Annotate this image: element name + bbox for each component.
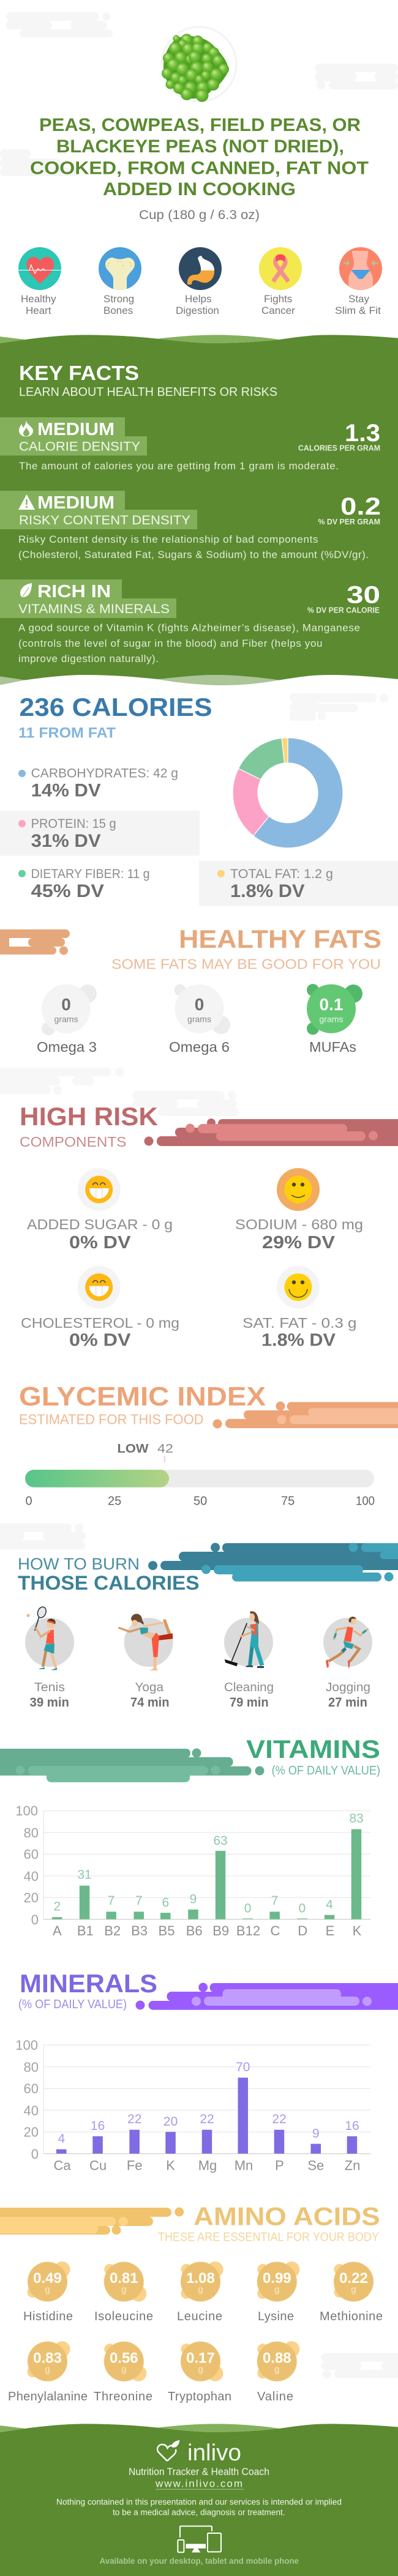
amino: threonine: Threonine xyxy=(94,2390,152,2403)
label: healthy heart: Healthy xyxy=(21,293,56,305)
icon: devices xyxy=(178,2526,221,2553)
fact: rich in vitamins and minerals: % DV PER CALORIE xyxy=(307,606,380,614)
glycemic scale bar: 75 xyxy=(281,1495,295,1508)
fact: risky content density: MEDIUM xyxy=(37,493,115,513)
macro: total fat: 1.8% DV xyxy=(230,881,305,901)
icon: fights cancer ribbon xyxy=(259,247,302,290)
amino: leucine: g xyxy=(198,2285,203,2295)
bar chart: vitamins: 2 xyxy=(53,1899,61,1913)
fat: omega 6: 0 xyxy=(195,995,204,1014)
activity label: tennis: 39 min xyxy=(29,1696,69,1710)
bar chart: vitamins: A xyxy=(53,1923,62,1938)
bar chart: vitamins: B3 xyxy=(131,1923,148,1938)
macro: total fat xyxy=(199,861,398,906)
bar chart: vitamins: 0 xyxy=(31,1912,39,1927)
amino: tryptophan: 0.17 xyxy=(186,2350,215,2366)
bar chart: vitamins: 100 xyxy=(15,1803,38,1818)
component: added sugar xyxy=(27,1168,173,1253)
bar chart: minerals: Zn xyxy=(345,2158,360,2173)
amino: methionine xyxy=(320,2261,383,2323)
fact: calorie density: MEDIUM xyxy=(37,420,115,439)
background cloud xyxy=(321,2353,398,2379)
amino: leucine: 1.08 xyxy=(186,2270,215,2287)
bar chart: vitamins: 7 xyxy=(271,1894,278,1908)
amino: isoleucine: 0.81 xyxy=(110,2270,138,2287)
bar chart: vitamins xyxy=(15,1803,370,1938)
macro: protein: PROTEIN: 15 g xyxy=(31,817,116,831)
bar chart: minerals: Mn xyxy=(235,2158,253,2173)
bar chart: minerals: 20 xyxy=(24,2124,39,2140)
amino: histidine: g xyxy=(45,2285,50,2295)
bar chart: vitamins: 63 xyxy=(213,1834,228,1848)
bar chart: vitamins: 83 xyxy=(349,1811,364,1826)
icon: leaf xyxy=(20,583,32,597)
bar chart: vitamins: 0 xyxy=(244,1902,251,1916)
activity label: yoga: 74 min xyxy=(130,1696,169,1710)
icon: healthy heart xyxy=(18,247,61,290)
amino: threonine: g xyxy=(121,2364,126,2375)
bar chart: vitamins: B2 xyxy=(104,1923,121,1938)
heading: HOW TO BURN xyxy=(18,1555,140,1573)
panel: minerals xyxy=(15,1969,398,2173)
amino: phenylalanine: g xyxy=(45,2364,50,2375)
component: added sugar: ADDED SUGAR - 0 g xyxy=(27,1216,173,1232)
bar chart: minerals: 70 xyxy=(236,2060,250,2074)
label: fights cancer: Cancer xyxy=(261,305,295,316)
bar chart: vitamins: 9 xyxy=(190,1892,197,1907)
macro: carbohydrates xyxy=(18,767,178,801)
tagline: Nutrition Tracker & Health Coach xyxy=(129,2466,269,2477)
bar chart: vitamins: 7 xyxy=(135,1894,143,1908)
fat: MUFAs xyxy=(307,984,362,1055)
bar chart: vitamins: K xyxy=(353,1923,362,1938)
bar chart: vitamins: B6 xyxy=(186,1923,203,1938)
availability note: Available on your desktop, tablet and mobile phone xyxy=(99,2556,299,2566)
fat: omega 3 xyxy=(37,985,97,1055)
amino: tryptophan: Tryptophan xyxy=(168,2390,231,2403)
fact: risky content density: % DV PER GRAM xyxy=(318,517,380,526)
label: strong bones: Strong xyxy=(103,293,134,305)
background clouds: header xyxy=(0,12,398,176)
panel: vitamins xyxy=(0,1735,380,1938)
logo: inlivo xyxy=(157,2440,241,2466)
activity label: yoga: Yoga xyxy=(135,1681,164,1694)
amino: phenylalanine: 0.83 xyxy=(33,2350,62,2366)
icon: stay slim and fit xyxy=(339,247,382,291)
amino: leucine: Leucine xyxy=(177,2310,222,2323)
glycemic value marker xyxy=(118,1442,173,1462)
panel: key facts xyxy=(0,335,398,685)
bar chart: minerals: 22 xyxy=(200,2112,214,2126)
bar chart: minerals: Cu xyxy=(89,2158,107,2173)
subheading: (% OF DAILY VALUE) xyxy=(272,1764,380,1778)
macro: protein xyxy=(0,811,200,856)
amino: isoleucine: g xyxy=(121,2285,126,2295)
component: sodium: SODIUM - 680 mg xyxy=(235,1216,363,1232)
fat: omega 3: Omega 3 xyxy=(37,1039,97,1055)
fat: omega 3: grams xyxy=(54,1014,78,1024)
activity label: cleaning: Cleaning xyxy=(224,1681,274,1694)
amino: leucine xyxy=(177,2261,223,2323)
bar chart: vitamins: 7 xyxy=(108,1894,115,1908)
decoration: orange streaks xyxy=(0,929,70,955)
amino: phenylalanine: Phenylalanine xyxy=(8,2390,88,2403)
glycemic value marker: 42 xyxy=(157,1442,173,1456)
serving size: Cup (180 g / 6.3 oz) xyxy=(139,208,260,222)
glycemic scale bar: 0 xyxy=(26,1495,32,1508)
label: healthy heart: Heart xyxy=(26,305,51,316)
bar chart: minerals: 22 xyxy=(127,2112,141,2126)
bar chart: minerals: 22 xyxy=(272,2112,287,2126)
title xyxy=(30,115,369,199)
title: ADDED IN COOKING xyxy=(103,179,296,199)
wave background xyxy=(0,2424,398,2576)
amino: isoleucine: Isoleucine xyxy=(94,2310,153,2323)
bar chart: minerals: 4 xyxy=(58,2132,65,2146)
decoration: red streaks xyxy=(145,1119,398,1146)
bar chart: minerals: Ca xyxy=(53,2158,71,2173)
subheading: COMPONENTS xyxy=(20,1134,127,1150)
bar chart: vitamins: E xyxy=(326,1923,334,1938)
macro: protein: 31% DV xyxy=(31,831,101,851)
label: stay slim and fit: Stay xyxy=(348,293,370,305)
health benefits row xyxy=(18,247,382,316)
amino: methionine: Methionine xyxy=(320,2310,383,2323)
amino: phenylalanine xyxy=(8,2341,88,2403)
activity label: tennis: Tenis xyxy=(34,1681,65,1694)
decoration: teal streaks xyxy=(148,1543,398,1582)
bar chart: minerals: 40 xyxy=(24,2103,39,2118)
logo: inlivo: inlivo xyxy=(187,2440,241,2466)
decoration: purple streaks xyxy=(136,1982,398,2010)
fact: rich in vitamins and minerals: RICH IN xyxy=(37,582,111,601)
website link: www.inlivo.com xyxy=(155,2478,242,2490)
icon: strong bones xyxy=(99,247,141,291)
macro: carbohydrates: 14% DV xyxy=(31,781,101,801)
fact: calorie density: CALORIES PER GRAM xyxy=(298,443,380,453)
fact: rich in vitamins and minerals: VITAMINS & MINERALS xyxy=(18,602,170,616)
component: sodium: 29% DV xyxy=(262,1233,336,1253)
amino: valine: 0.88 xyxy=(263,2350,291,2366)
activity label: jogging xyxy=(326,1681,370,1710)
component: cholesterol xyxy=(21,1266,179,1350)
subheading: 11 FROM FAT xyxy=(18,725,116,742)
component: saturated fat: SAT. FAT - 0.3 g xyxy=(242,1315,356,1331)
activity: cleaning xyxy=(224,1611,273,1668)
bar chart: vitamins: 4 xyxy=(326,1898,333,1912)
bar chart: minerals: 20 xyxy=(163,2115,178,2129)
glycemic scale bar xyxy=(25,1470,375,1508)
bar chart: minerals: 60 xyxy=(24,2081,39,2096)
fact: risky content density: RISKY CONTENT DENSITY xyxy=(19,513,190,527)
amino: methionine: 0.22 xyxy=(339,2270,368,2287)
panel: how to burn those calories xyxy=(18,1543,398,1710)
macro: dietary fiber xyxy=(18,867,150,901)
bar chart: minerals: P xyxy=(275,2158,284,2173)
panel: glycemic index xyxy=(19,1382,398,1508)
disclaimer: Nothing contained in this presentation and our services is intended or implied xyxy=(56,2498,342,2507)
component: saturated fat: 1.8% DV xyxy=(261,1331,336,1350)
subheading: ESTIMATED FOR THIS FOOD xyxy=(19,1411,203,1427)
macro: dietary fiber: DIETARY FIBER: 11 g xyxy=(31,867,150,881)
amino: lysine: Lysine xyxy=(258,2310,294,2323)
bar chart: minerals: 9 xyxy=(312,2127,320,2140)
amino: valine: g xyxy=(274,2364,279,2375)
title: PEAS, COWPEAS, FIELD PEAS, OR xyxy=(39,115,361,135)
macro: total fat: TOTAL FAT: 1.2 g xyxy=(230,867,333,881)
component: saturated fat xyxy=(242,1266,356,1350)
panel: how to burn those calories: THOSE CALORIES xyxy=(18,1572,200,1594)
glycemic scale bar: 100 xyxy=(356,1495,375,1508)
heading: KEY FACTS xyxy=(19,362,139,384)
glycemic value marker: LOW xyxy=(118,1442,149,1456)
subheading: (% OF DAILY VALUE) xyxy=(18,1998,127,2011)
activity: jogging xyxy=(323,1617,372,1669)
amino: threonine: 0.56 xyxy=(110,2350,138,2366)
donut chart xyxy=(233,738,343,848)
panel: high risk components xyxy=(20,1102,398,1350)
background cloud xyxy=(290,693,388,721)
component: sodium xyxy=(235,1168,363,1253)
heading: GLYCEMIC INDEX xyxy=(19,1382,266,1412)
icon: warning triangle xyxy=(18,494,35,510)
fat: MUFAs: grams xyxy=(320,1014,343,1024)
bar chart: vitamins: B1 xyxy=(77,1923,94,1938)
fat: omega 3: 0 xyxy=(61,995,71,1014)
subheading: SOME FATS MAY BE GOOD FOR YOU xyxy=(111,956,381,972)
background cloud: burn section xyxy=(0,1524,86,1549)
bar chart: minerals: 100 xyxy=(15,2038,38,2053)
title: COOKED, FROM CANNED, FAT NOT xyxy=(30,158,369,179)
bar chart: minerals: Fe xyxy=(127,2158,143,2173)
disclaimer: to be a medical advice, diagnosis or treatment. xyxy=(113,2508,285,2517)
bar chart: vitamins: 6 xyxy=(162,1896,169,1910)
fat: omega 6 xyxy=(169,984,230,1055)
bar chart: vitamins: 20 xyxy=(24,1890,39,1905)
bar chart: minerals: 0 xyxy=(31,2146,39,2162)
bar chart: vitamins: 80 xyxy=(24,1825,39,1841)
activity label: jogging: Jogging xyxy=(326,1681,370,1694)
bar chart: vitamins: 0 xyxy=(299,1902,306,1916)
amino: lysine: 0.99 xyxy=(263,2270,291,2287)
fact: calorie density: CALORIE DENSITY xyxy=(19,439,140,454)
food image: bowl of peas xyxy=(162,27,236,102)
heading: HIGH RISK xyxy=(20,1102,158,1131)
fact: risky content density: (Cholesterol, Saturated Fat, Sugars & Sodium) to the amount (%DV/gr). xyxy=(18,549,369,560)
bar chart: minerals: Mg xyxy=(198,2158,217,2173)
fat: MUFAs: MUFAs xyxy=(309,1039,356,1055)
bar chart: vitamins: B12 xyxy=(236,1923,260,1938)
heading: AMINO ACIDS xyxy=(193,2202,380,2231)
glycemic scale bar: 50 xyxy=(193,1495,207,1508)
fact: calorie density: 1.3 xyxy=(345,420,380,447)
bar chart: vitamins: 60 xyxy=(24,1847,39,1862)
icon: flame xyxy=(19,420,33,437)
fact: rich in vitamins and minerals: A good source of Vitamin K (fights Alzheimer’s disease), Manganese xyxy=(18,622,360,634)
fat: omega 6: grams xyxy=(187,1014,211,1024)
activity label: yoga xyxy=(130,1681,169,1710)
activity label: jogging: 27 min xyxy=(328,1696,367,1710)
panel: calories xyxy=(0,693,398,906)
activity label: tennis xyxy=(29,1681,69,1710)
panel: healthy fats xyxy=(0,925,381,1055)
heading: 236 CALORIES xyxy=(20,693,212,721)
fact: rich in vitamins and minerals: improve digestion naturally). xyxy=(18,653,159,664)
label: helps digestion: Helps xyxy=(185,293,211,305)
amino: histidine: Histidine xyxy=(23,2310,73,2323)
wave background xyxy=(0,335,398,685)
macro: dietary fiber: 45% DV xyxy=(31,881,104,901)
icon: helps digestion xyxy=(179,247,222,290)
fact: rich in vitamins and minerals: 30 xyxy=(347,581,380,608)
label: strong bones: Bones xyxy=(103,305,133,316)
fact: risky content density: 0.2 xyxy=(340,493,381,520)
fact: risky content density xyxy=(0,491,381,560)
heading: HEALTHY FATS xyxy=(179,925,381,953)
amino: lysine xyxy=(257,2261,299,2323)
fact: risky content density: Risky Content density is the relationship of bad components xyxy=(18,534,318,545)
amino: isoleucine xyxy=(94,2261,153,2323)
bar chart: vitamins: D xyxy=(298,1923,307,1938)
bar chart: minerals: 16 xyxy=(345,2119,359,2133)
decoration: green streaks xyxy=(0,1749,265,1782)
activity: tennis xyxy=(25,1606,74,1670)
decoration: yellow streaks xyxy=(0,2208,184,2235)
amino: lysine: g xyxy=(274,2285,279,2295)
macro: carbohydrates: CARBOHYDRATES: 42 g xyxy=(31,767,178,781)
activity label: cleaning xyxy=(224,1681,274,1710)
label: stay slim and fit: Slim & Fit xyxy=(335,305,381,316)
background clouds: above high risk xyxy=(0,1068,239,1116)
bar chart: minerals: 16 xyxy=(91,2119,105,2133)
panel: footer xyxy=(0,2424,398,2576)
activity: yoga xyxy=(118,1614,173,1670)
bar chart: vitamins: B5 xyxy=(159,1923,175,1938)
fat: MUFAs: 0.1 xyxy=(320,995,343,1014)
amino: tryptophan xyxy=(168,2342,231,2403)
bar chart: minerals: K xyxy=(166,2158,175,2173)
bar chart: vitamins: 31 xyxy=(77,1867,92,1882)
fat: omega 6: Omega 6 xyxy=(169,1039,230,1055)
fact: calorie density xyxy=(0,417,380,472)
component: added sugar: 0% DV xyxy=(69,1233,131,1253)
amino: histidine xyxy=(23,2261,73,2323)
component: cholesterol: 0% DV xyxy=(69,1331,131,1350)
amino: threonine xyxy=(94,2342,152,2403)
title: BLACKEYE PEAS (NOT DRIED), xyxy=(56,136,344,157)
amino: valine xyxy=(257,2341,299,2403)
label: fights cancer: Fights xyxy=(264,293,292,305)
panel: amino acids xyxy=(0,2202,398,2403)
amino: histidine: 0.49 xyxy=(33,2270,62,2287)
bar chart: vitamins: 40 xyxy=(24,1869,39,1884)
amino: tryptophan: g xyxy=(198,2364,203,2375)
fact: rich in vitamins and minerals: (controls the level of sugar in the blood) and Fiber (helps you xyxy=(18,638,322,649)
subheading: LEARN ABOUT HEALTH BENEFITS OR RISKS xyxy=(19,385,277,399)
label: helps digestion: Digestion xyxy=(176,305,219,316)
bar chart: vitamins: C xyxy=(270,1923,280,1938)
fact: rich in vitamins and minerals xyxy=(0,579,380,664)
bar chart: minerals: Se xyxy=(307,2158,324,2173)
amino: valine: Valine xyxy=(257,2390,293,2403)
heading: VITAMINS xyxy=(246,1735,380,1763)
bar chart: vitamins: B9 xyxy=(212,1923,229,1938)
fact: calorie density: The amount of calories you are getting from 1 gram is moderate. xyxy=(19,460,339,472)
subheading: THESE ARE ESSENTIAL FOR YOUR BODY xyxy=(158,2230,379,2244)
component: cholesterol: CHOLESTEROL - 0 mg xyxy=(21,1315,179,1331)
amino: methionine: g xyxy=(351,2285,356,2295)
activity label: cleaning: 79 min xyxy=(230,1696,269,1710)
bar chart: minerals xyxy=(15,2038,370,2173)
bar chart: minerals: 80 xyxy=(24,2060,39,2075)
decoration: orange streaks xyxy=(213,1401,398,1428)
heading: MINERALS xyxy=(20,1969,157,1998)
glycemic scale bar: 25 xyxy=(108,1495,121,1508)
